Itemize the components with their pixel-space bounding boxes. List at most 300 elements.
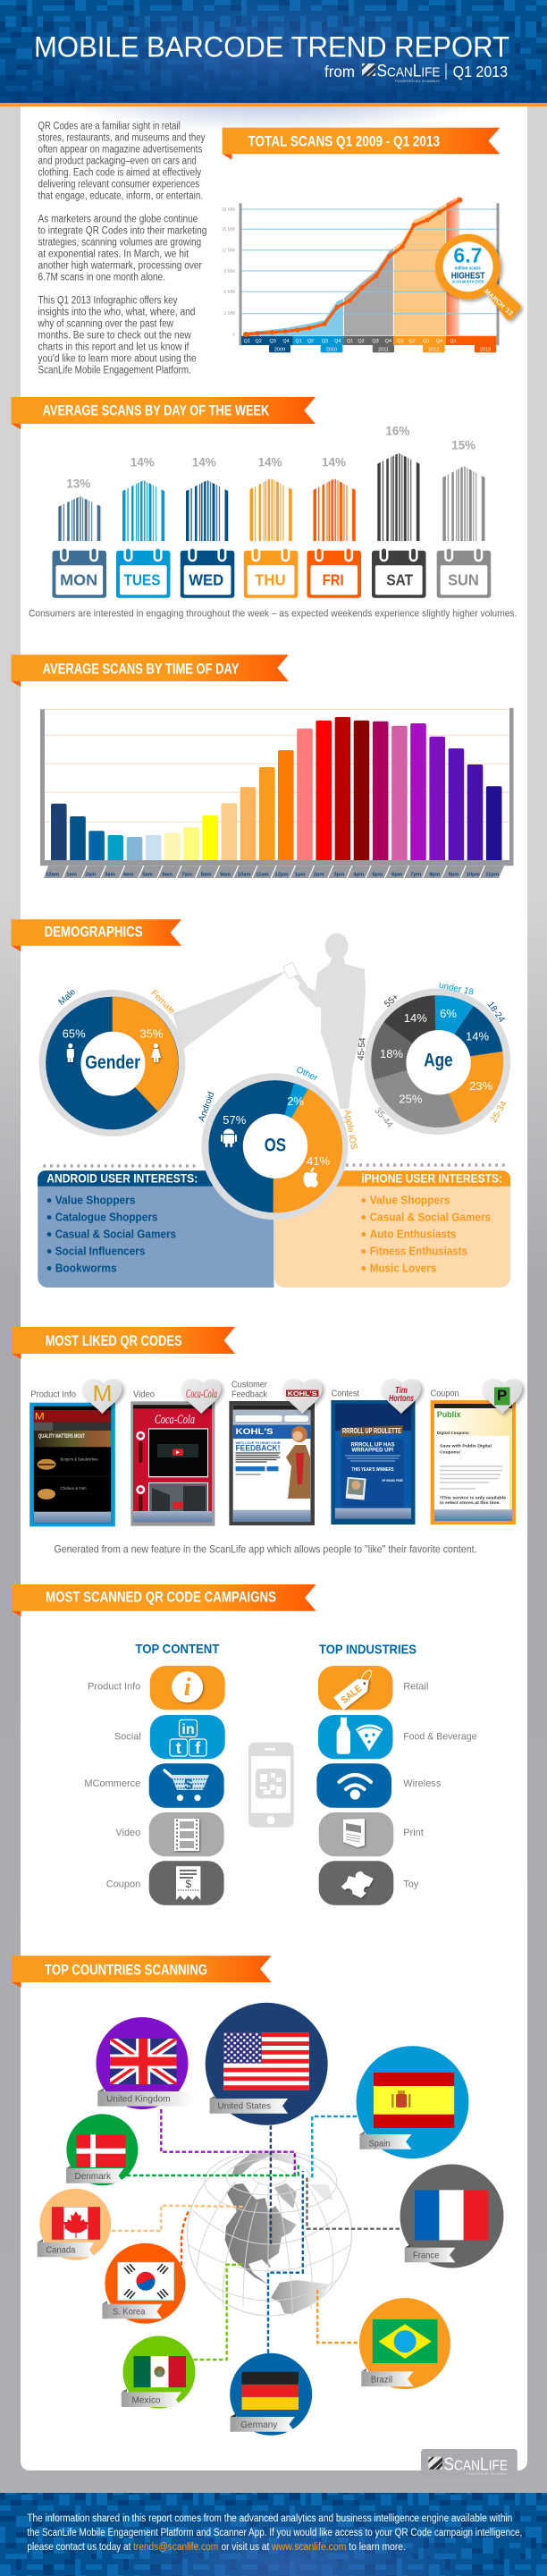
heart: McDonald's	[82, 1380, 122, 1414]
intro text block: As marketers around the globe continue	[38, 214, 198, 224]
percent labels: 14%	[130, 455, 155, 469]
intro text block: clothing. Each code is aimed at effectively	[38, 167, 201, 178]
heart: Kohl's: KOHL'S	[288, 1389, 316, 1398]
donut: age: 25-34	[489, 1099, 509, 1124]
phone: coupon: Coupons!	[440, 1450, 460, 1454]
heading: top countries: TOP COUNTRIES SCANNING	[45, 1963, 207, 1979]
land: Greenland	[274, 2183, 297, 2209]
column: top industries	[316, 1643, 477, 1905]
content labels: Product Info	[88, 1681, 140, 1692]
connector: Canada	[112, 2206, 244, 2231]
industry labels	[403, 1681, 477, 1889]
industry labels: Wireless	[403, 1778, 442, 1789]
hour tabs: 2pm	[314, 872, 324, 877]
callout: magnifier 6.7 million: 6.7	[453, 243, 482, 266]
donut: age: 14%	[404, 1011, 427, 1025]
hour tabs: 11pm	[485, 872, 499, 877]
phone: contest: RRROLL UP ROULETTE	[342, 1427, 401, 1435]
land: Europe edge	[309, 2184, 333, 2200]
hour tabs: 6am	[162, 872, 173, 877]
phone: video: Video	[133, 1389, 155, 1399]
country: South Korea	[102, 2243, 185, 2324]
icon: print magazine	[319, 1812, 393, 1856]
donut: operating system: Apple iOS	[341, 1109, 358, 1151]
logo: ScanLife footer badge: POWERED BY SCANBUY	[466, 2472, 509, 2476]
heading: most liked: MOST LIKED QR CODES	[46, 1333, 182, 1349]
trend line	[243, 198, 462, 337]
footer text	[27, 2513, 522, 2553]
heart: Tim Hortons: Tim	[395, 1386, 408, 1396]
country: Germany: Germany	[240, 2420, 277, 2430]
hour tabs: 4am	[123, 872, 133, 877]
donut: operating system: Other	[295, 1065, 320, 1084]
land: South America	[271, 2280, 331, 2314]
quarter bar: Q1	[397, 339, 404, 344]
intro text block: strategies, scanning volumes are growing	[38, 237, 201, 248]
icon: apple	[304, 1168, 318, 1187]
donut: age: under 18	[438, 981, 475, 998]
column: top industries: TOP INDUSTRIES	[319, 1643, 417, 1658]
phone: coupon: Save with Publix Digital	[440, 1443, 492, 1448]
donut: operating system	[197, 1065, 358, 1220]
icon: sale tag	[318, 1666, 393, 1710]
phone: contest: WRRAPPED UP!	[351, 1448, 394, 1454]
like hearts with brand logos	[82, 1380, 522, 1414]
industry labels: Retail	[403, 1681, 428, 1692]
phone: customer feedback: Customer	[231, 1380, 267, 1390]
country: United Kingdom	[97, 2017, 194, 2109]
country: United States: United States	[218, 2102, 271, 2112]
donut: age: 55+	[383, 992, 400, 1009]
intro text block: delivering relevant consumer experiences	[38, 179, 199, 190]
panel: android user interests	[38, 1170, 274, 1288]
footer text: trends@scanlife.com	[133, 2542, 218, 2553]
country: United States	[206, 2003, 328, 2125]
phone: contest: Contest	[332, 1389, 359, 1399]
percent labels	[66, 424, 476, 491]
connector dashed lines	[112, 2109, 400, 2360]
country: South Korea: S. Korea	[113, 2307, 146, 2317]
iphone list	[361, 1195, 491, 1275]
industry labels: Toy	[403, 1879, 419, 1889]
quarter bar: 2011	[378, 347, 389, 352]
donut: gender: Gender	[85, 1052, 140, 1073]
donut: operating system: Android	[197, 1091, 217, 1123]
barcode bars	[58, 453, 484, 541]
country: Germany	[230, 2353, 312, 2436]
phone: customer feedback: Feedback	[231, 1389, 268, 1400]
intro text block: often appear on magazine advertisements	[38, 144, 203, 155]
flag: Mexico	[134, 2356, 186, 2387]
percent labels: 14%	[192, 455, 216, 469]
quarter bar: Q3	[423, 339, 429, 344]
icon: sale tag: SALE	[340, 1684, 364, 1706]
dotted dividers	[43, 1165, 508, 1166]
icon: puzzle piece	[319, 1861, 393, 1905]
heart: Tim Hortons	[382, 1380, 421, 1414]
phone: contest: RRROLL UP HAS	[350, 1443, 395, 1448]
flag: South Korea	[118, 2262, 174, 2301]
donut: gender: 35%	[139, 1026, 164, 1041]
phone: customer feedback: WE'D LOVE TO HEAR YOUR	[236, 1441, 281, 1445]
intro text block: another high watermark, processing over	[38, 260, 202, 271]
phone: product info: Product Info	[30, 1389, 76, 1399]
phone: coupon: *This service is only available	[440, 1495, 507, 1500]
axis labels: 9 MM	[223, 269, 235, 274]
hour tabs: 12am	[46, 872, 59, 877]
subtitle with ScanLife logo: SCANLIFE	[377, 63, 440, 80]
country: Canada: Canada	[46, 2245, 76, 2255]
connector: Brazil	[317, 2288, 358, 2343]
heading: demographics: DEMOGRAPHICS	[45, 925, 143, 941]
footer text: to learn more.	[349, 2542, 406, 2553]
bar chart: scans by hour	[40, 708, 513, 878]
caption: most liked: Generated from a new feature in the ScanLife app which allows people to "like" their favorite content.	[54, 1543, 477, 1556]
donut: age: 35-44	[372, 1106, 395, 1130]
donut: gender	[39, 987, 186, 1136]
quarter bar: Q1	[244, 339, 250, 344]
phone: coupon: in select stores at this time.	[440, 1500, 501, 1505]
chart: barcodes by day	[52, 424, 491, 598]
logo: ScanLife footer badge: SCANLIFE	[443, 2454, 508, 2474]
hour tabs: 3am	[105, 872, 115, 877]
donut: operating system: OS	[265, 1135, 286, 1155]
quarter bar: Q4	[385, 339, 391, 344]
connector: Denmark	[121, 2166, 299, 2175]
calendar tiles	[52, 547, 491, 598]
phone: coupon: Coupon	[431, 1389, 459, 1399]
heart: Coca-Cola	[181, 1380, 221, 1414]
axis labels: 3 MM	[223, 311, 235, 317]
area fills	[243, 196, 459, 335]
iphone list: Casual & Social Gamers	[370, 1212, 491, 1224]
donut: operating system: 41%	[307, 1154, 330, 1168]
percent labels: 16%	[385, 424, 410, 438]
android list: Social Influencers	[55, 1246, 145, 1258]
hour tabs: 1pm	[295, 872, 306, 877]
phone: coupon: Digital Coupons	[437, 1431, 469, 1435]
connector: Mexico	[194, 2265, 244, 2360]
connector: United Kingdom	[161, 2109, 295, 2175]
country: Brazil	[359, 2298, 450, 2389]
callout: magnifier 6.7 million: SCAN MONTH EVER	[452, 279, 484, 284]
quarter bar: Q4	[436, 339, 442, 344]
hour tabs: 4pm	[353, 872, 364, 877]
subtitle with ScanLife logo: Q1 2013	[453, 63, 508, 80]
calendar tiles: FRI	[323, 570, 344, 588]
icon: shopping cart	[149, 1763, 224, 1808]
quarter bar: 2013	[480, 347, 491, 352]
calendar tiles: SAT	[386, 570, 413, 588]
intro text block: This Q1 2013 Infographic offers key	[38, 295, 178, 306]
bars	[51, 717, 502, 862]
donut: age: 6%	[440, 1007, 457, 1020]
icon: android	[221, 1128, 237, 1147]
iphone list: Fitness Enthusiasts	[370, 1246, 467, 1258]
donut: age: 45-54	[357, 1037, 368, 1061]
icon: bottle and pizza	[318, 1715, 393, 1759]
axis labels: 6 MM	[223, 290, 235, 295]
phone: product info: QUALITY MATTERS MOST	[38, 1434, 85, 1440]
footer text: www.scanlife.com	[271, 2542, 347, 2553]
donut: gender: Male	[57, 987, 78, 1008]
woman figure	[286, 1426, 310, 1499]
country: Spain	[356, 2046, 468, 2158]
donut: age: 25%	[399, 1093, 423, 1105]
hour tabs: 9pm	[448, 872, 459, 877]
hour tabs: 12pm	[274, 872, 289, 877]
quarter bar: Q1	[450, 339, 457, 344]
donut: age: 18%	[380, 1047, 403, 1060]
axis labels	[222, 207, 235, 338]
icon: wifi	[316, 1763, 391, 1808]
donut: operating system: 2%	[287, 1094, 304, 1108]
hour tabs: 8am	[201, 872, 212, 877]
phone: product info: Burgers & Sandwiches	[61, 1457, 98, 1461]
percent labels: 14%	[258, 455, 282, 469]
phone: product info: Chicken & Fish	[61, 1486, 87, 1491]
illustration: person scanning with beam	[173, 933, 366, 1109]
icon: social	[150, 1715, 225, 1759]
iphone list: Auto Enthusiasts	[370, 1229, 457, 1241]
heading: top countries	[12, 1955, 272, 1988]
content labels: Social	[114, 1731, 141, 1742]
footer text: or visit us at	[222, 2542, 270, 2553]
calendar tiles: TUES	[123, 570, 161, 588]
axis labels: 12 MM	[222, 249, 235, 254]
android list: Casual & Social Gamers	[55, 1229, 176, 1241]
quarter bar: Q2	[358, 339, 365, 344]
industry labels: Print	[403, 1828, 424, 1838]
panel: iphone user interests: iPHONE USER INTERESTS:	[361, 1172, 502, 1186]
phone: product info	[29, 1389, 115, 1526]
intro text block: and product packaging–even on cars and	[38, 156, 197, 166]
icon: shopping cart: $	[184, 1776, 193, 1793]
hour tabs: 1am	[66, 872, 77, 877]
quarter bar: Q3	[322, 339, 328, 344]
connector: Spain	[312, 2116, 357, 2179]
heading: most liked	[12, 1327, 235, 1359]
heading: most scanned	[12, 1584, 316, 1617]
donut: age: Age	[424, 1051, 453, 1071]
donut: age: 23%	[469, 1079, 493, 1093]
hour tabs: 7am	[181, 872, 192, 877]
heading: total scans	[223, 128, 500, 160]
calendar tiles: WED	[189, 570, 223, 588]
percent labels: 15%	[451, 437, 476, 452]
quarter bar: Q4	[334, 339, 341, 344]
phone: contest: THIS YEAR'S WINNERS	[352, 1467, 394, 1473]
donut: gender: 65%	[63, 1026, 86, 1041]
intro text block: why of scanning over the past few	[38, 318, 173, 329]
icon: film	[149, 1812, 224, 1856]
country: Mexico: Mexico	[132, 2395, 161, 2405]
flag: Canada	[52, 2207, 100, 2240]
hour tabs	[44, 866, 504, 878]
heart: Publix	[483, 1380, 522, 1414]
axis frame	[40, 708, 513, 866]
heart: Kohl's	[282, 1380, 322, 1414]
flag: USA	[223, 2032, 309, 2090]
phone: video	[130, 1389, 215, 1526]
hour tabs: 9am	[220, 872, 231, 877]
hour tabs: 10pm	[467, 872, 480, 877]
hour tabs: 7pm	[410, 872, 421, 877]
donut: age: 14%	[466, 1030, 489, 1043]
connector: France	[307, 2175, 400, 2229]
content labels: Coupon	[106, 1879, 140, 1889]
quarter bar: 2010	[326, 347, 337, 352]
country: France	[400, 2164, 504, 2268]
donut: operating system: 57%	[223, 1113, 247, 1127]
column: top content	[84, 1642, 225, 1905]
heart: McDonald's: M	[93, 1381, 113, 1406]
iphone list: Value Shoppers	[370, 1195, 450, 1207]
intro text block: that engage, educate, inform, or entertain.	[38, 190, 203, 201]
heart: Tim Hortons: Hortons	[389, 1394, 414, 1404]
heading: time of day	[11, 655, 289, 687]
country: Denmark: Denmark	[75, 2172, 112, 2182]
calendar tiles: MON	[60, 570, 97, 588]
heading: demographics	[11, 919, 181, 951]
phone: contest: VIP GRAND PRIZE	[382, 1479, 403, 1482]
hour tabs: 3pm	[333, 872, 344, 877]
subtitle with ScanLife logo: POWERED BY SCANBUY	[395, 80, 441, 83]
phone: video: Coca-Cola	[155, 1413, 195, 1427]
percent labels: 13%	[66, 477, 91, 491]
icon: man	[67, 1043, 74, 1062]
intro text block: 6.7M scans in one month alone.	[38, 272, 165, 283]
hour tabs: 10am	[238, 872, 251, 877]
iphone list: Music Lovers	[370, 1263, 436, 1275]
column: top content: TOP CONTENT	[135, 1642, 219, 1657]
line chart: total scans	[222, 196, 521, 352]
content labels: MCommerce	[84, 1778, 140, 1789]
phone: contest	[331, 1389, 415, 1524]
android list: Value Shoppers	[55, 1195, 136, 1207]
icon: social: t	[176, 1739, 181, 1757]
intro text block: to integrate QR Codes into their marketing	[38, 225, 206, 236]
quarter bar: 2009	[274, 347, 285, 352]
icon: info: i	[184, 1673, 191, 1702]
hour tabs: 2am	[86, 872, 96, 877]
heading: time of day: AVERAGE SCANS BY TIME OF DAY	[43, 661, 239, 677]
flag: UK	[110, 2039, 177, 2084]
donut: age	[357, 981, 510, 1135]
phone: customer feedback: KOHL'S	[236, 1427, 274, 1437]
heading: most scanned: MOST SCANNED QR CODE CAMPAIGNS	[46, 1589, 276, 1605]
country: Brazil: Brazil	[371, 2375, 392, 2385]
hour tabs: 6pm	[391, 872, 402, 877]
flag: Denmark	[77, 2134, 125, 2167]
heading: day of week: AVERAGE SCANS BY DAY OF THE WEEK	[43, 402, 269, 418]
axis labels: 18 MM	[222, 207, 235, 213]
intro text block: QR Codes are a familiar sight in retail	[38, 121, 181, 131]
android list: Catalogue Shoppers	[55, 1212, 158, 1224]
footer banner	[0, 2493, 547, 2576]
intro text block: ScanLife Mobile Engagement Platform.	[38, 365, 191, 376]
icon: receipt: $	[185, 1878, 191, 1890]
heart: Coca-Cola: Coca-Cola	[186, 1388, 217, 1401]
android list	[47, 1195, 176, 1275]
intro text block: stores, restaurants, and museums and they	[38, 132, 206, 143]
phone: product info: M	[35, 1411, 45, 1422]
country: Mexico	[122, 2335, 195, 2409]
subtitle with ScanLife logo: from	[324, 63, 355, 80]
heading: day of week	[11, 397, 316, 429]
intro text block: at exponential rates. In March, we hit	[38, 249, 189, 259]
quarter bar	[241, 336, 496, 352]
intro text block: you'd like to learn more about using the	[38, 353, 197, 364]
icon: social: f	[195, 1739, 201, 1757]
intro text block: months. Be sure to check out the new	[38, 330, 191, 341]
donut: age: 18-24	[485, 1000, 507, 1025]
android list: Bookworms	[55, 1263, 117, 1275]
donut: gender: Female	[148, 988, 177, 1017]
hour tabs: 11am	[256, 872, 269, 877]
callout: magnifier 6.7 million: million scans	[455, 266, 481, 272]
panel: iphone user interests	[274, 1170, 510, 1288]
phone: coupon	[431, 1389, 516, 1524]
quarter bar: Q2	[307, 339, 314, 344]
footer text: please contact us today at	[27, 2542, 131, 2553]
panel: android user interests: ANDROID USER INTERESTS:	[46, 1172, 198, 1186]
intro text block: insights into the who, what, where, and	[38, 307, 195, 317]
quarter bar: Q2	[408, 339, 416, 344]
caption: day of week: Consumers are interested in engaging throughout the week – as expected weekends experience slightly higher volumes.	[29, 608, 517, 619]
country: France: France	[413, 2251, 440, 2260]
percent labels: 14%	[322, 455, 347, 469]
subtitle with ScanLife logo	[324, 63, 508, 83]
flag: Germany	[241, 2372, 299, 2410]
icon: receipt	[149, 1861, 224, 1905]
axis labels: 15 MM	[222, 227, 235, 232]
icon: social: in	[181, 1722, 195, 1737]
country: Denmark	[66, 2114, 138, 2185]
callout: magnifier 6.7 million: MARCH '13	[483, 287, 515, 317]
connector: South Korea	[164, 2211, 189, 2273]
callout: magnifier 6.7 million	[435, 234, 521, 320]
country: Spain: Spain	[368, 2139, 390, 2149]
connector: United States	[270, 2125, 272, 2244]
quarter bar: 2012	[428, 347, 439, 352]
axis labels: 0	[232, 333, 235, 338]
industry labels: Food & Beverage	[403, 1731, 477, 1742]
phone: customer feedback: FEEDBACK!	[236, 1443, 281, 1454]
calendar tiles: THU	[255, 570, 286, 588]
flag: Brazil	[373, 2319, 437, 2363]
connector: Germany	[268, 2171, 303, 2353]
flag: Spain	[374, 2073, 454, 2128]
hour tabs: 8pm	[429, 872, 440, 877]
icon: info	[150, 1666, 225, 1710]
heart: Publix: P	[497, 1387, 507, 1404]
hour tabs: 5pm	[372, 872, 383, 877]
title: MOBILE BARCODE TREND REPORT	[34, 30, 509, 63]
hour tabs: 5am	[142, 872, 153, 877]
callout: magnifier 6.7 million: HIGHEST	[451, 272, 484, 282]
phone: coupon: Publix	[437, 1410, 461, 1420]
land: North America	[225, 2183, 297, 2285]
icon: woman	[151, 1043, 161, 1062]
globe	[188, 2150, 352, 2316]
country: Canada	[38, 2189, 111, 2260]
intro text block	[38, 121, 206, 376]
intro text block: charts in this report and let us know if	[38, 342, 189, 352]
phone: customer feedback	[229, 1380, 315, 1525]
quarter bar: Q4	[282, 339, 290, 344]
country: United Kingdom: United Kingdom	[106, 2095, 170, 2105]
